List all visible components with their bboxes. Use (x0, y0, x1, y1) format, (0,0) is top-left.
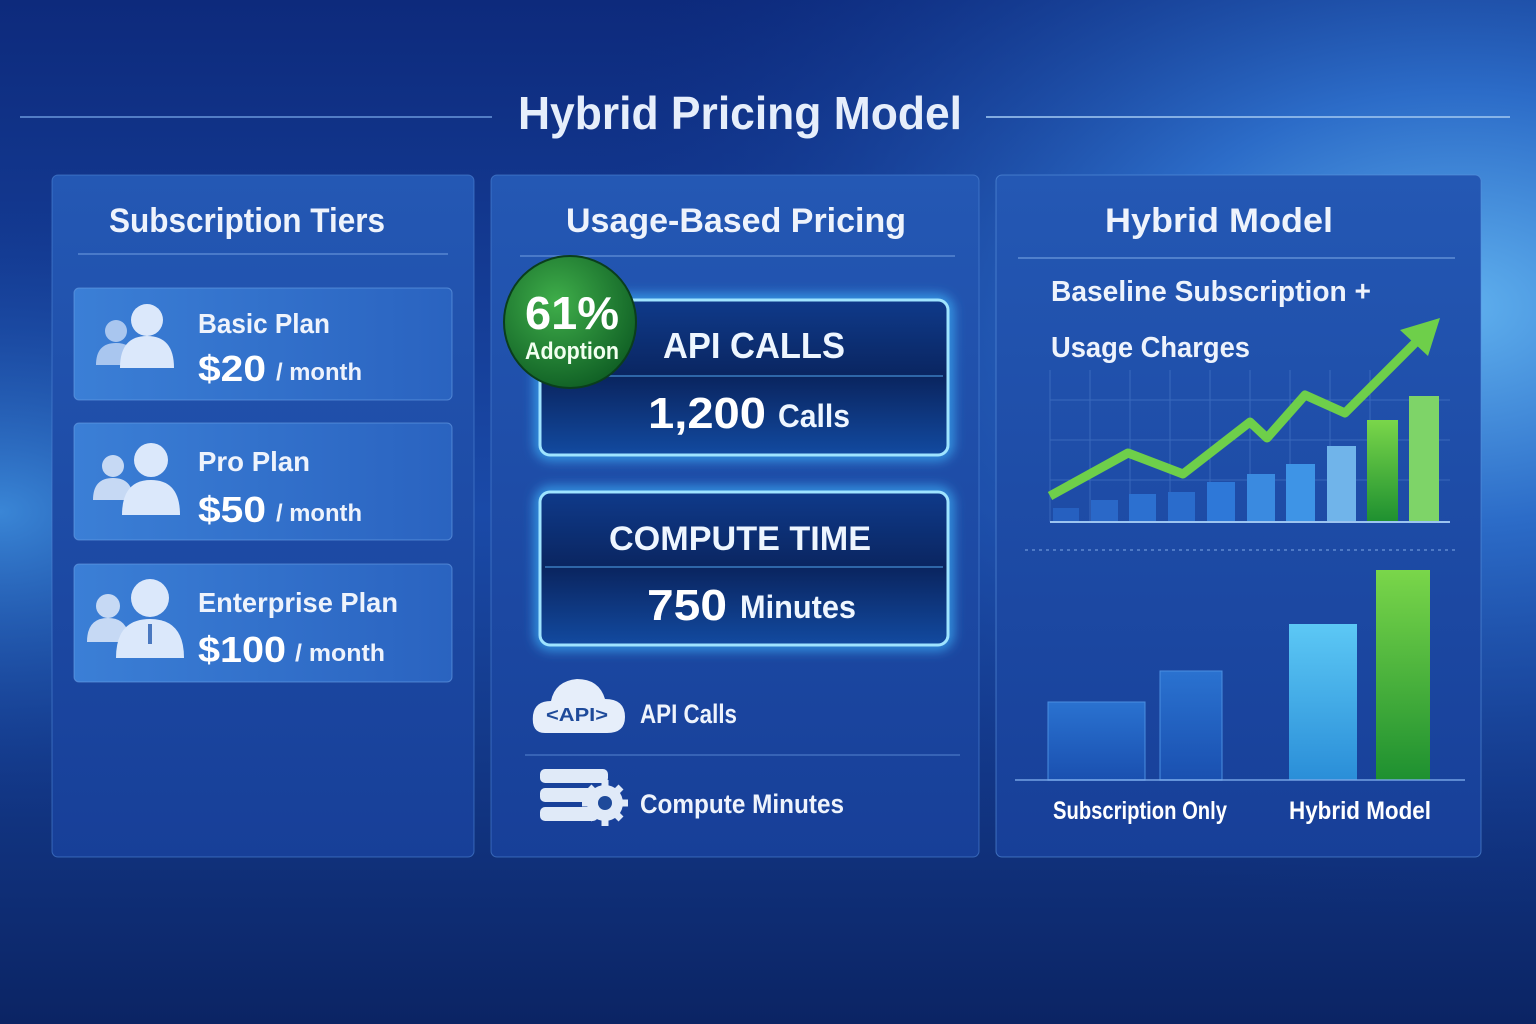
card: pro plan: $50 (198, 489, 266, 530)
icon: users (93, 443, 180, 515)
card: pro plan (74, 423, 452, 540)
card: basic plan: / month (276, 359, 362, 386)
chart: subscription only vs hybrid model: Hybrid Model (1289, 797, 1431, 825)
metric box: compute time (540, 492, 948, 645)
card: enterprise plan: / month (295, 640, 385, 667)
card: basic plan: $20 (198, 348, 266, 389)
label: compute minutes: Compute Minutes (640, 789, 844, 819)
metric box: compute time: COMPUTE TIME (609, 520, 871, 558)
chart: subscription only vs hybrid model (1015, 570, 1465, 825)
icon: api cloud: <API> (546, 705, 608, 725)
card: basic plan (74, 288, 452, 400)
chart: growth bars and trend line (1050, 318, 1450, 522)
metric box: api calls: Calls (778, 398, 850, 434)
text: baseline subscription + usage charges: Usage Charges (1051, 332, 1250, 364)
chart: subscription only vs hybrid model: Subscription Only (1053, 797, 1227, 825)
metric box: compute time: 750 (647, 581, 727, 630)
metric box: api calls: 1,200 (648, 389, 766, 438)
title: Hybrid Pricing Model (518, 87, 962, 139)
metric box: api calls (540, 300, 948, 455)
icon: users (96, 304, 174, 368)
card: basic plan: Basic Plan (198, 308, 330, 339)
badge: 61% adoption (504, 256, 636, 388)
icon: api cloud (533, 679, 625, 733)
card: pro plan: Pro Plan (198, 446, 310, 477)
text: baseline subscription + usage charges (1051, 276, 1371, 364)
card: enterprise plan: $100 (198, 629, 286, 670)
label: api calls: API Calls (640, 699, 737, 729)
card: pro plan: / month (276, 500, 362, 527)
card: enterprise plan: Enterprise Plan (198, 587, 398, 618)
panel: hybrid model (996, 175, 1481, 857)
panel: subscription tiers (52, 175, 474, 857)
badge: 61% adoption: 61% (525, 287, 619, 339)
metric box: api calls: API CALLS (663, 325, 845, 366)
heading: usage-based pricing: Usage-Based Pricing (566, 202, 906, 240)
icon: users with tie (87, 579, 184, 658)
badge: 61% adoption: Adoption (525, 338, 619, 365)
icon: server gear (540, 769, 628, 826)
metric box: compute time: Minutes (740, 589, 856, 625)
heading: hybrid model: Hybrid Model (1105, 202, 1333, 240)
card: enterprise plan (74, 564, 452, 682)
text: baseline subscription + usage charges: Baseline Subscription + (1051, 276, 1371, 308)
panel: usage-based pricing (491, 175, 979, 857)
heading: subscription tiers: Subscription Tiers (109, 202, 385, 240)
